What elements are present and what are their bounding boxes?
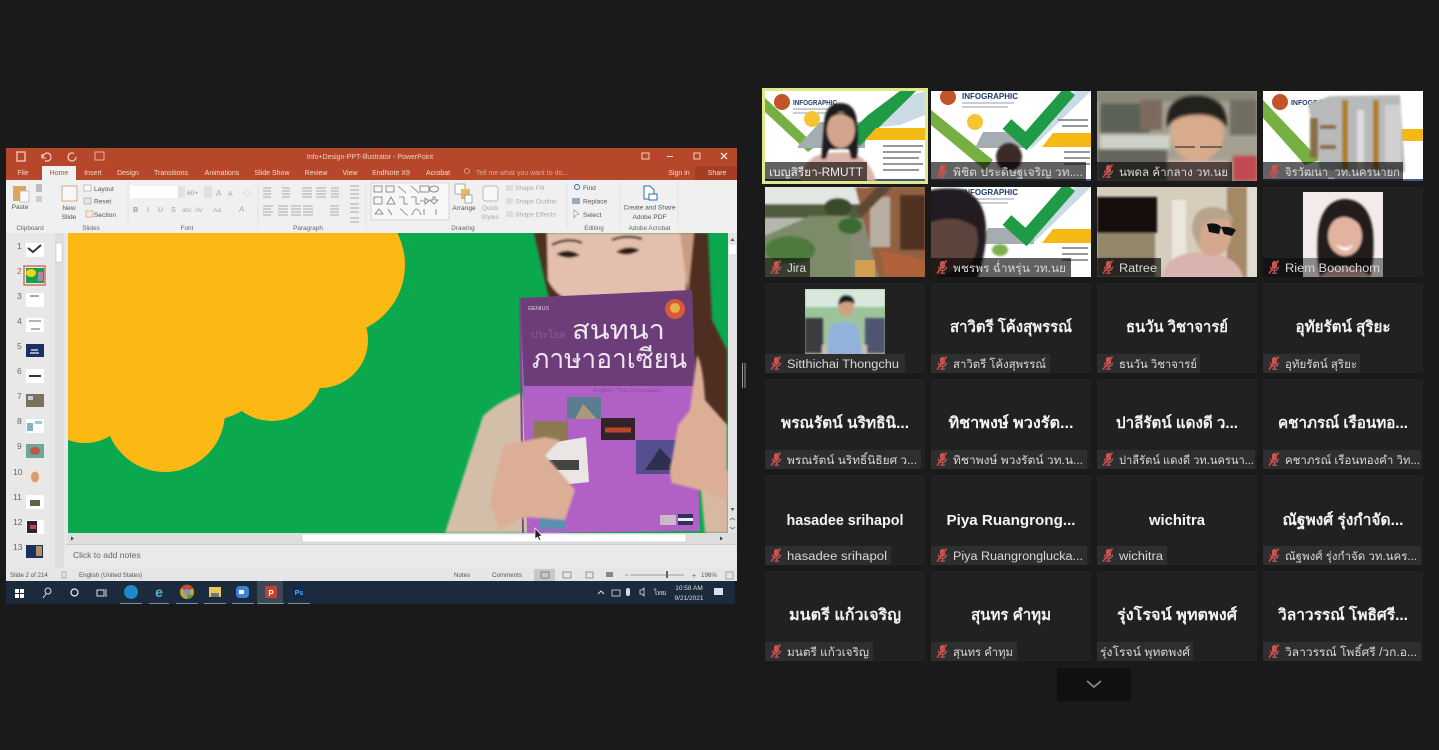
tile: คชาภรณ์ เรือนทองคำ: คชาภรณ์ เรือนทอ... [1278, 414, 1408, 432]
tile: Sitthichai Thongchu [765, 289, 905, 373]
tile: พรณรัตน์ นริทธิ์นิธิยศ [765, 379, 925, 469]
editing group: Select [583, 212, 601, 219]
icon: internet explorer: e [155, 584, 163, 600]
mouse cursor [535, 528, 542, 540]
status bar: Notes [454, 572, 470, 579]
editing group: Editing [584, 225, 604, 232]
editing group: Replace [583, 198, 608, 206]
tile: ณัฐพงศ์ รุ่งกำจัด: ณัฐพงศ์ รุ่งกำจัด... [1282, 511, 1404, 530]
clipboard group: Paste [12, 204, 29, 211]
drawing group: Arrange [452, 205, 476, 212]
ribbon tabs: Transitions [154, 170, 188, 177]
tile: Riem Boonchom [1268, 192, 1383, 277]
icon: cortana [71, 589, 78, 596]
status bar: English (United States) [79, 572, 142, 579]
ribbon tabs: Tell me what you want to do... [476, 170, 568, 177]
font group: ◇ [243, 189, 251, 198]
clipboard group [12, 184, 44, 232]
icon: file explorer [209, 587, 221, 597]
icon: windows start [15, 589, 24, 598]
tile: Jira [765, 187, 925, 277]
tile: พชรพร [926, 187, 1091, 282]
ribbon tabs: Insert [84, 170, 102, 177]
tile: wichitra [1097, 475, 1257, 565]
ribbon tabs: Design [117, 170, 139, 177]
paragraph group: Paragraph [293, 225, 323, 232]
name label: Riem Boonchom [1285, 263, 1380, 275]
slide thumbnails pane: 2 [17, 266, 22, 276]
slides group: New [62, 205, 76, 212]
editing group [572, 184, 608, 232]
adobe acrobat group: Adobe PDF [632, 214, 667, 221]
next page chevron button [1057, 668, 1131, 701]
ribbon tabs: File [17, 170, 29, 177]
font group: Font [181, 225, 194, 232]
name label [765, 258, 810, 277]
notes pane: Click to add notes [73, 550, 141, 560]
slide thumbnails pane: 3 [17, 291, 22, 301]
name label: นพดล ค้ากลาง วท.นย [1119, 166, 1228, 179]
drawing group: Shape Outline [515, 198, 557, 206]
name label [1263, 162, 1403, 181]
tile: วิลาวรรณ์ โพธิ์ศรี: วิลาวรรณ์ โพธิ์ศรี /วก.อ... [1284, 643, 1417, 659]
tile: ทิชาพงษ์ พวงรัตน์ [931, 379, 1091, 469]
tile: เบญสิรียา-RMUTT: INFOGRAPHIC [793, 100, 837, 107]
name label: เบญสิรียา-RMUTT [769, 166, 863, 179]
tile: wichitra: wichitra [1118, 551, 1164, 563]
icon: powerpoint: P [268, 589, 274, 598]
clipboard group: Clipboard [16, 225, 44, 232]
font group: Aa [213, 207, 221, 214]
icon: photoshop [293, 586, 305, 598]
font group: I [147, 207, 149, 214]
slide thumbnails pane: 6 [17, 366, 22, 376]
tile: สุนทร คำทุม [931, 571, 1091, 661]
tile: จิรวัฒนา [1263, 91, 1423, 181]
ribbon tabs: Slide Show [254, 170, 290, 177]
title bar [6, 148, 737, 180]
adobe acrobat group [623, 186, 676, 232]
tile: Piya Ruangronglucka: Piya Ruangronglucka... [953, 551, 1083, 563]
tile: เบญสิรียา-RMUTT [762, 88, 928, 184]
tile: Piya Ruangronglucka [931, 475, 1091, 565]
hands [490, 355, 727, 530]
book: English - Thai Conversation [594, 388, 661, 394]
system tray [598, 585, 723, 602]
tile: มนตรี แก้วเจริญ: มนตรี แก้วเจริญ [789, 606, 901, 624]
editing group: Find [583, 185, 596, 192]
tile: รุ่งโรจน์ พุทตพงศ์: รุ่งโรจน์ พุทตพงศ์ [1100, 645, 1191, 659]
name label [1263, 258, 1383, 277]
status bar: Slide 2 of 214 [10, 572, 48, 579]
tile: ปาลีรัตน์ แดงดี [1097, 379, 1257, 469]
font group: A [228, 191, 233, 198]
tile: ณัฐพงศ์ รุ่งกำจัด [1263, 475, 1423, 565]
font group: A [239, 205, 245, 214]
name label [931, 162, 1086, 181]
slide thumbnails pane: 4 [17, 316, 22, 326]
ribbon tabs: EndNote X9 [372, 170, 410, 177]
drawing group: Shape Effects [515, 212, 557, 218]
panel divider handle [742, 363, 745, 388]
title bar: Info+Design-PPT-Illustrator - PowerPoint [307, 154, 433, 161]
tile: สาวิตรี โค้งสุพรรณ์ [931, 283, 1091, 373]
name label: Ratree [1119, 263, 1157, 275]
slides group [62, 185, 116, 232]
font group: A [216, 189, 222, 198]
tile: พรณรัตน์ นริทธิ์นิธิยศ: พรณรัตน์ นริทธิ์นิธิยศ ว... [787, 451, 917, 467]
slide thumbnails pane: 8 [17, 416, 22, 426]
icon: photoshop: Ps [295, 590, 303, 597]
drawing group: Quick [482, 205, 499, 212]
slides group: Layout [94, 186, 114, 193]
font group: S [171, 207, 176, 214]
icon: task view [97, 589, 106, 597]
system tray: 10:58 AM [675, 585, 703, 592]
tile: พิชิต ประดิษฐเจริญ [931, 89, 1091, 181]
name label: จิรวัฒนา_วท.นครนายก [1285, 166, 1400, 179]
participants gallery [760, 88, 1423, 661]
notes pane [66, 544, 737, 568]
name label [931, 258, 1071, 277]
ribbon tabs [17, 166, 737, 180]
slide thumbnails pane: 9 [17, 441, 22, 451]
tile: ธนวัน วิชาจารย์ [1097, 283, 1257, 373]
windows taskbar [6, 581, 735, 604]
system tray: 9/21/2021 [675, 595, 704, 602]
tile: ปาลีรัตน์ แดงดี: ปาลีรัตน์ แดงดี ว... [1116, 414, 1238, 432]
tile: วิลาวรรณ์ โพธิ์ศรี: วิลาวรรณ์ โพธิศรี... [1278, 605, 1408, 624]
name label [1097, 162, 1232, 181]
tile: มนตรี แก้วเจริญ [765, 571, 925, 661]
tile: Ratree [1097, 187, 1257, 277]
tile: รุ่งโรจน์ พุทตพงศ์ [1097, 571, 1257, 661]
tile: สุนทร คำทุม: สุนทร คำทุม [971, 606, 1051, 625]
drawing group [371, 183, 557, 232]
avatar photo [1303, 192, 1383, 277]
tile: รุ่งโรจน์ พุทตพงศ์: รุ่งโรจน์ พุทตพงศ์ [1117, 605, 1238, 625]
font group: abc [182, 208, 192, 214]
book [520, 290, 700, 533]
book: GENIUS [528, 306, 549, 312]
slide canvas [68, 233, 728, 533]
drawing group: Styles [481, 214, 500, 221]
ribbon tabs: View [342, 170, 358, 177]
tile: ปาลีรัตน์ แดงดี: ปาลีรัตน์ แดงดี วท.นครนา... [1119, 453, 1254, 467]
name label: พิชิต ประดิษฐเจริญ วท.... [953, 166, 1083, 179]
slide thumbnails pane: 10 [13, 467, 23, 477]
avatar photo [805, 289, 885, 355]
font group: AV [195, 208, 203, 214]
tile: พชรพร: INFOGRAPHIC [962, 188, 1018, 197]
slide thumbnails pane: 12 [13, 517, 23, 527]
status bar [6, 568, 737, 581]
slide thumbnails pane: 13 [13, 542, 23, 552]
name label [765, 354, 905, 373]
tile: มนตรี แก้วเจริญ: มนตรี แก้วเจริญ [787, 646, 869, 659]
ribbon tabs: Review [305, 170, 328, 177]
book: ภาษาอาเซียน [532, 344, 687, 374]
name label: พชรพร ฉ่ำหรุ่น วท.นย [953, 260, 1066, 275]
tile: สาวิตรี โค้งสุพรรณ์: สาวิตรี โค้งสุพรรณ์ [953, 357, 1046, 371]
ribbon tabs: Share [708, 170, 726, 177]
drawing group: Shape Fill [515, 185, 545, 192]
status bar: Comments [492, 572, 522, 579]
font group: 60+ [187, 190, 198, 197]
tile: จิรวัฒนา: INFOGRA [1291, 98, 1324, 107]
drawing group: Drawing [451, 225, 475, 232]
name label: Jira [787, 263, 807, 275]
ribbon tabs: Sign in [668, 170, 690, 177]
system tray: ไทย [653, 588, 666, 597]
name label [1097, 258, 1161, 277]
tile: wichitra: wichitra [1148, 513, 1206, 529]
slide thumbnails pane [6, 233, 66, 568]
icon: powerpoint [257, 581, 283, 604]
icon: edge [124, 585, 138, 599]
icon: zoom [236, 586, 249, 598]
tile: อุทัยรัตน์ สุริยะ: อุทัยรัตน์ สุริยะ [1296, 318, 1390, 337]
tile: สาวิตรี โค้งสุพรรณ์: สาวิตรี โค้งสุพรรณ์ [950, 317, 1073, 337]
slide thumbnails pane: 7 [17, 391, 22, 401]
name label [765, 162, 867, 181]
ribbon [6, 180, 737, 233]
name label: Sitthichai Thongchu [787, 359, 899, 371]
tile: พรณรัตน์ นริทธิ์นิธิยศ: พรณรัตน์ นริทธินิ... [781, 414, 909, 432]
tile: ทิชาพงษ์ พวงรัตน์: ทิชาพงษ์ พวงรัตน์ วท.น... [953, 453, 1083, 467]
tile: hasadee srihapol: hasadee srihapol [787, 551, 887, 563]
status bar: 196% [701, 572, 717, 579]
tile: นพดล ค้ากลาง [1097, 91, 1257, 181]
icon: search [43, 588, 51, 598]
paragraph group [263, 186, 359, 232]
tile: คชาภรณ์ เรือนทองคำ [1263, 379, 1423, 469]
tile: อุทัยรัตน์ สุริยะ [1263, 283, 1423, 373]
adobe acrobat group: Create and Share [623, 204, 676, 212]
font group [130, 186, 251, 232]
slides group: Slide [62, 214, 77, 221]
slide thumbnails pane: 11 [13, 492, 22, 502]
slide thumbnails pane: 1 [17, 241, 22, 251]
woman holding book [445, 233, 728, 533]
powerpoint window [6, 148, 737, 604]
slides group: Slides [82, 225, 100, 232]
tile: พิชิต ประดิษฐเจริญ: INFOGRAPHIC [962, 92, 1018, 101]
tile: hasadee srihapol [765, 475, 925, 565]
slides group: Section [94, 212, 116, 219]
tile: อุทัยรัตน์ สุริยะ: อุทัยรัตน์ สุริยะ [1285, 357, 1357, 371]
tile: คชาภรณ์ เรือนทองคำ: คชาภรณ์ เรือนทองคำ วิท... [1285, 453, 1420, 467]
slide thumbnails pane: 5 [17, 341, 22, 351]
tile: Piya Ruangronglucka: Piya Ruangrong... [946, 513, 1076, 529]
tile: สุนทร คำทุม: สุนทร คำทุม [953, 646, 1013, 659]
ribbon tabs: Home [50, 170, 68, 177]
tile: ธนวัน วิชาจารย์: ธนวัน วิชาจารย์ [1126, 318, 1228, 336]
slides group: Reset [94, 198, 111, 206]
vertical scrollbar [728, 233, 737, 534]
ribbon tabs: Animations [205, 170, 240, 177]
yellow scalloped shape [68, 233, 405, 472]
icon: chrome [180, 585, 194, 599]
tile: วิลาวรรณ์ โพธิ์ศรี [1263, 571, 1423, 661]
status bar: + [692, 573, 696, 580]
tile: ธนวัน วิชาจารย์: ธนวัน วิชาจารย์ [1119, 357, 1197, 371]
tile: hasadee srihapol: hasadee srihapol [786, 513, 904, 529]
book: ประโยค [531, 328, 566, 341]
font group: B [133, 207, 138, 214]
tile: ณัฐพงศ์ รุ่งกำจัด: ณัฐพงศ์ รุ่งกำจัด วท.นคร... [1285, 549, 1417, 563]
font group: U [158, 207, 163, 214]
tile: ทิชาพงษ์ พวงรัตน์: ทิชาพงษ์ พวงรัต... [948, 414, 1074, 432]
horizontal scrollbar [68, 533, 737, 544]
ribbon tabs: Acrobat [426, 170, 450, 177]
book: สนทนา [572, 315, 665, 345]
adobe acrobat group: Adobe Acrobat [629, 225, 671, 232]
